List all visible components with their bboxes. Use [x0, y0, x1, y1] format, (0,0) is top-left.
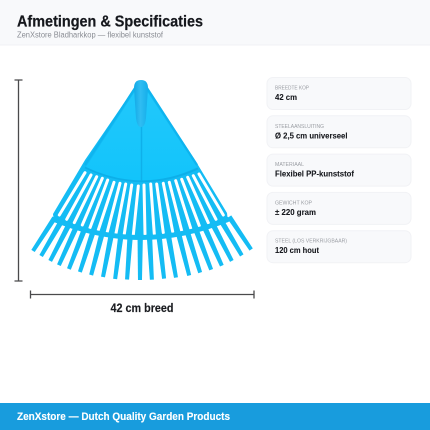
rake lower tines	[31, 215, 253, 280]
centre rib	[140, 125, 142, 181]
rake illustration	[31, 80, 253, 280]
spec card: materiaal	[267, 154, 411, 186]
plate side edges	[85, 88, 197, 165]
spec card: breedte kop: BREEDTE KOP	[275, 86, 309, 92]
spec card: breedte kop	[267, 78, 411, 110]
width dimension line	[30, 290, 254, 298]
footer bar: ZenXstore — Dutch Quality Garden Products	[17, 411, 230, 423]
handle socket	[134, 80, 148, 127]
subtitle: ZenXstore Bladharkkop — flexibel kunststof	[17, 30, 164, 40]
spec card: materiaal: MATERIAAL	[275, 162, 305, 168]
spec card: gewicht kop	[267, 192, 411, 224]
spec card: gewicht kop: ± 220 gram	[275, 207, 316, 217]
rake head plate	[86, 89, 197, 181]
spec card: materiaal: Flexibel PP-kunststof	[275, 169, 354, 179]
title: Afmetingen & Specificaties	[17, 14, 203, 30]
spec card: steel: 120 cm hout	[275, 245, 319, 255]
plate arc	[85, 168, 198, 181]
spec card: breedte kop: 42 cm	[275, 92, 297, 102]
rake upper fan with slots	[53, 87, 228, 238]
spec card: steel	[267, 231, 411, 263]
footer bar	[0, 403, 430, 430]
width label: 42 cm breed	[110, 303, 174, 315]
spec card: gewicht kop: GEWICHT KOP	[275, 200, 312, 206]
spec card: steel: STEEL (LOS VERKRIJGBAAR)	[275, 239, 347, 245]
spec card: steelaansluiting: Ø 2,5 cm universeel	[275, 130, 348, 140]
height dimension line	[14, 80, 22, 281]
header	[0, 0, 430, 46]
spec card: steelaansluiting	[267, 116, 411, 148]
spec card: steelaansluiting: STEELAANSLUITING	[275, 124, 324, 130]
rake crossbar	[53, 219, 229, 238]
